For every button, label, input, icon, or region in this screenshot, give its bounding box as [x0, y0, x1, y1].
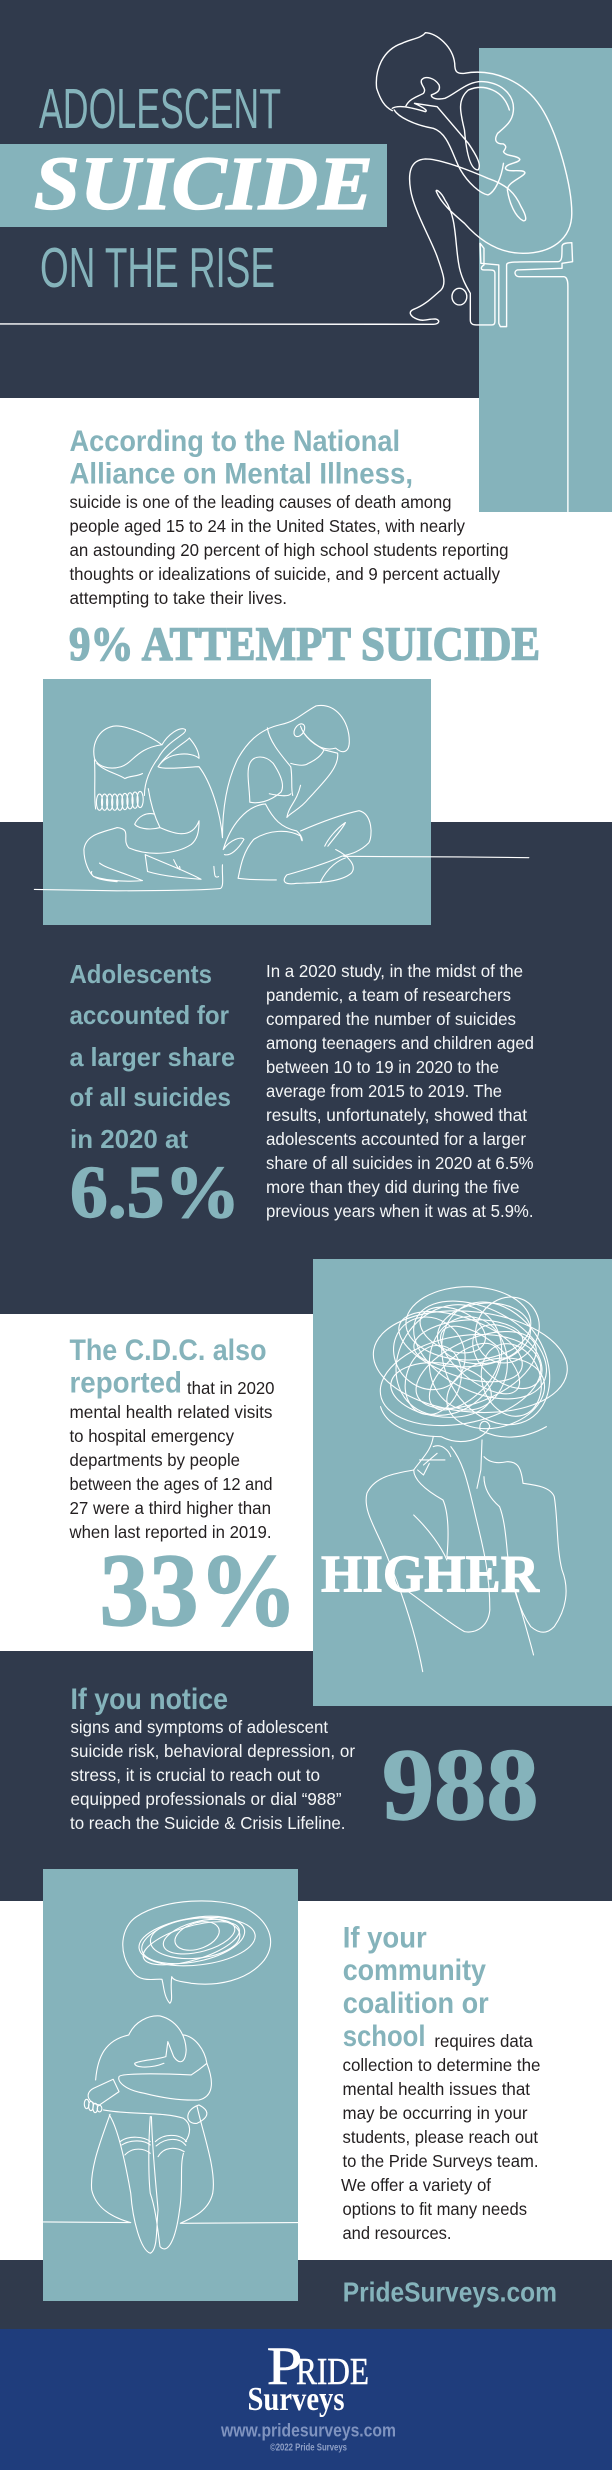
panel: study band: [0, 822, 612, 1314]
study paragraph: results, unfortunately, showed that: [266, 1105, 527, 1125]
intro text block: attempting to take their lives.: [70, 588, 287, 608]
illustration: person sitting on stool: [0, 33, 573, 512]
community text block: mental health issues that: [342, 2079, 530, 2099]
panel: two seated figures: [43, 679, 431, 925]
study paragraph: average from 2015 to 2019. The: [266, 1081, 502, 1101]
title: [0, 77, 387, 300]
community text block: coalition or: [343, 1987, 489, 2020]
community text block: to the Pride Surveys team.: [342, 2151, 538, 2171]
CDC text block: 27 were a third higher than: [70, 1498, 271, 1518]
stat number: 988: 988: [382, 1728, 538, 1842]
crisis text block: [70, 1683, 355, 1833]
left column: adolescents stat: a larger share: [70, 1042, 235, 1072]
study paragraph: In a 2020 study, in the midst of the: [266, 961, 523, 981]
intro text block: Alliance on Mental Illness,: [70, 458, 413, 490]
CDC text block: mental health related visits: [70, 1402, 273, 1422]
community text block: [341, 1922, 540, 2243]
panel: footer: [0, 2329, 612, 2470]
CDC text block: [69, 1334, 275, 1542]
left column: adolescents stat: of all suicides: [70, 1082, 231, 1112]
panel: header band: [0, 0, 612, 398]
panel: website band: [0, 2260, 612, 2329]
CDC body: that in 2020: [187, 1378, 275, 1398]
study paragraph: among teenagers and children aged: [266, 1033, 534, 1053]
website link: PrideSurveys.com: [343, 2276, 557, 2308]
CDC heading: The C.D.C. also: [70, 1334, 266, 1367]
footer logo: Pride Surveys: Surveys: [248, 2381, 344, 2418]
study paragraph: more than they did during the five: [266, 1177, 520, 1197]
footer logo: Pride Surveys: P: [266, 2336, 302, 2396]
community text block: We offer a variety of: [341, 2175, 491, 2195]
CDC text block: to hospital emergency: [70, 1426, 234, 1446]
panel: tangled thoughts figure: [313, 1259, 612, 1706]
study paragraph: between 10 to 19 in 2020 to the: [266, 1057, 499, 1077]
footer url: www.pridesurveys.com: [220, 2420, 396, 2440]
community text block: may be occurring in your: [342, 2103, 528, 2123]
study paragraph: pandemic, a team of researchers: [266, 985, 511, 1005]
community text block: school: [343, 2020, 426, 2053]
left column: adolescents stat: in 2020 at: [70, 1124, 188, 1154]
stat number: 6.5%: 6.5%: [70, 1152, 240, 1234]
study paragraph: [266, 961, 534, 1221]
CDC text block: reported: [70, 1366, 182, 1400]
crisis text block: equipped professionals or dial “988”: [70, 1789, 342, 1809]
community text block: community: [343, 1954, 486, 1987]
study paragraph: share of all suicides in 2020 at 6.5%: [266, 1153, 534, 1173]
crisis text block: suicide risk, behavioral depression, or: [70, 1741, 355, 1761]
CDC text block: when last reported in 2019.: [69, 1522, 272, 1542]
CDC text block: departments by people: [70, 1450, 240, 1470]
community text block: collection to determine the: [342, 2055, 540, 2075]
intro text block: an astounding 20 percent of high school students reporting: [70, 540, 508, 560]
illustration: hunched figure with scribble speech bubble: [43, 1901, 299, 2253]
left column: adolescents stat: [70, 959, 240, 1234]
intro text block: people aged 15 to 24 in the United States, with nearly: [70, 516, 465, 536]
study paragraph: compared the number of suicides: [266, 1009, 516, 1029]
intro heading: According to the National: [70, 425, 400, 458]
panel: figure with speech bubble: [43, 1869, 298, 2301]
left column: adolescents stat: accounted for: [70, 1000, 229, 1030]
crisis text block: stress, it is crucial to reach out to: [70, 1765, 320, 1785]
community text block: and resources.: [342, 2223, 452, 2243]
community text block: students, please reach out: [342, 2127, 538, 2147]
crisis text block: to reach the Suicide & Crisis Lifeline.: [70, 1813, 346, 1833]
title line: adolescent: ADOLESCENT: [39, 77, 281, 141]
stat word: higher: HIGHER: [321, 1546, 540, 1604]
stat lead-in: Adolescents: [70, 959, 212, 989]
title line: suicide: SUICIDE: [34, 142, 373, 226]
crisis body: signs and symptoms of adolescent: [70, 1717, 328, 1737]
footer logo: Pride Surveys: [248, 2336, 369, 2418]
community text block: options to fit many needs: [342, 2199, 527, 2219]
intro text block: [70, 425, 508, 608]
footer copyright: ©2022 Pride Surveys: [270, 2442, 347, 2454]
footer logo: Pride Surveys: RIDE: [296, 2351, 369, 2393]
study paragraph: previous years when it was at 5.9%.: [266, 1201, 534, 1221]
study paragraph: adolescents accounted for a larger: [266, 1129, 526, 1149]
CDC text block: between the ages of 12 and: [70, 1474, 272, 1494]
panel: header teal column: [479, 48, 612, 512]
illustration: figure with tangled scribble head: [366, 1281, 575, 1672]
stat heading: 9% attempt suicide: 9% ATTEMPT SUICIDE: [69, 618, 540, 671]
panel: 988 band: [0, 1651, 612, 1901]
stat number: 33%: 33%: [100, 1533, 298, 1648]
intro body: suicide is one of the leading causes of death among: [70, 492, 452, 512]
title line: on the rise: ON THE RISE: [40, 236, 275, 300]
community heading: If your: [343, 1922, 427, 1954]
illustration: two seated figures: [34, 705, 529, 891]
community body: requires data: [434, 2031, 533, 2051]
title band: [0, 144, 387, 227]
crisis heading: If you notice: [70, 1683, 228, 1716]
intro text block: thoughts or idealizations of suicide, and 9 percent actually: [70, 564, 500, 584]
stat: 33% higher: [100, 1533, 540, 1648]
